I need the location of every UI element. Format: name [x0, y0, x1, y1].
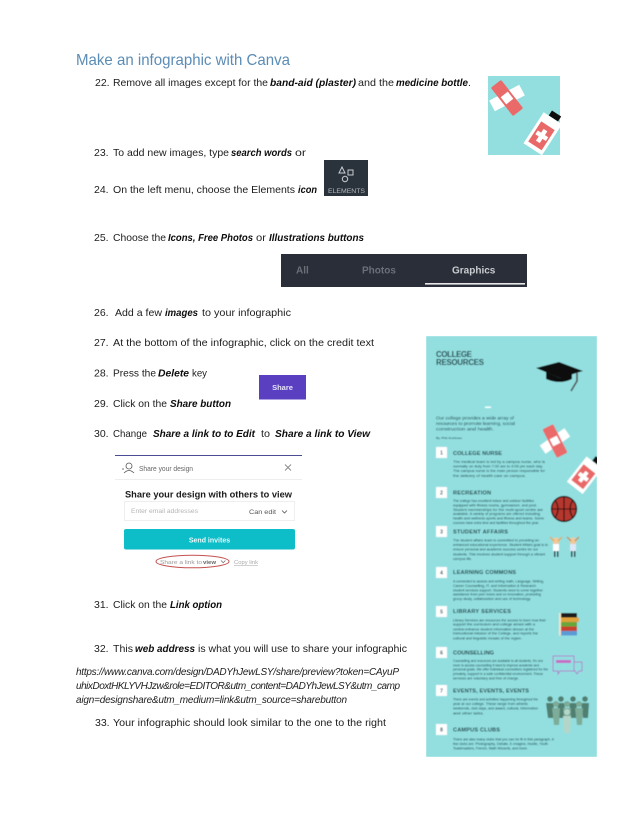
email field: [124, 502, 294, 520]
icon: stack of books: [559, 613, 579, 636]
icon: people: [122, 463, 134, 473]
step 27: 27.: [94, 337, 109, 349]
section 4: learning commons: 4: [440, 570, 443, 576]
section 6: counselling: more to access counselling if need to improve academic and: [453, 663, 539, 667]
section 6: counselling: services are voluntary and free of charge.: [453, 676, 519, 680]
send invites button: [124, 529, 295, 550]
section 4: learning commons: assistance from peer tutors and on innovation, promoting: [453, 593, 541, 597]
step 32: [94, 643, 407, 655]
step 29: 29.: [94, 398, 109, 410]
section 7: events, events, events: There are events and activities happening throughout the: [453, 698, 538, 702]
section 5: library services: Library Services are resources the access to learn how their: [453, 618, 547, 622]
image: band-aid and medicine bottle: [488, 76, 565, 155]
step 23: [94, 147, 307, 159]
section 2: recreation: 2: [440, 490, 443, 496]
section 7: events, events, events: 7: [440, 688, 443, 694]
section 2: recreation: equipped with fitness rooms, gymnasium, and pool.: [453, 503, 537, 507]
section 3: student affairs: enhanced educational experience. Student Affairs goal is to: [453, 543, 548, 547]
tab bar: all, photos, graphics: All: [296, 266, 309, 276]
title: Make an infographic with Canva: [76, 52, 290, 69]
step 26: images: [165, 307, 198, 319]
icon: close: [285, 464, 291, 470]
section 4: learning commons: LEARNING COMMONS: [453, 570, 516, 576]
step 30: 30.: [94, 428, 109, 440]
step 29: Share button: [170, 398, 231, 410]
section 5: library services: central entrance student information stream at the: [453, 627, 534, 631]
icon: elements button: [324, 160, 368, 196]
section 8: campus clubs: CAMPUS CLUBS: [453, 728, 500, 734]
tab bar: all, photos, graphics: Graphics: [452, 266, 496, 276]
section 4: learning commons: A connected to assess and writing math, Language, Writing,: [453, 579, 544, 583]
step 28: Delete: [158, 368, 189, 380]
section 8: campus clubs: There are also many clubs that you can be fit in this paragraph. A: [453, 737, 555, 741]
infographic heading: COLLEGE: [436, 350, 472, 359]
section 8: campus clubs: [436, 724, 555, 751]
section 1: college nurse: The medical team is led by a campus nurse, who is: [453, 460, 545, 464]
step 29: [94, 398, 231, 410]
step 30: to: [261, 428, 270, 440]
tab bar: all, photos, graphics: Photos: [362, 266, 396, 276]
section 7: events, events, events: [436, 685, 538, 716]
step 22: medicine bottle: [396, 77, 468, 89]
send invites button: Send invites: [189, 538, 230, 544]
infographic heading: [436, 350, 484, 367]
share link option, circled: [156, 555, 258, 568]
tab bar: all, photos, graphics: [281, 254, 527, 287]
step 23: search words: [231, 147, 292, 159]
panel: share your design dialog: [115, 455, 302, 568]
step 24: icon: [298, 184, 317, 196]
share button: [259, 375, 306, 400]
step 22: [95, 77, 471, 89]
web address link: uhixDoxtHKLYVHJzw&role=EDITOR&utm_content=DADYhJewLSY&utm_camp: [76, 681, 400, 692]
share link option, circled: Share a link to: [160, 560, 202, 566]
share link option, circled: view: [203, 560, 217, 566]
section 3: student affairs: [436, 526, 548, 561]
step 25: Icons, Free Photos: [168, 232, 253, 244]
web address link: https://www.canva.com/design/DADYhJewLSY/share/preview?token=CAyuP: [76, 667, 399, 678]
infographic heading: RESOURCES: [436, 358, 484, 367]
section 1: college nurse: normally on duty from 7:00 am to 4:00 pm each day.: [453, 465, 543, 469]
section 3: student affairs: The student affairs team is committed to providing an: [453, 538, 539, 542]
panel: college resources infographic: [426, 336, 606, 757]
section 5: library services: instructional mission of the College, and reports the: [453, 632, 538, 636]
email field: Enter email addresses: [131, 508, 199, 515]
icon: band-aid: [540, 424, 570, 458]
section 2: recreation: RECREATION: [453, 490, 491, 496]
section 2: recreation: available. A variety of programs are offered including: [453, 512, 540, 516]
section 3: student affairs: ensure personal and academic success centre for our: [453, 548, 539, 552]
icon: speech bubbles: [553, 656, 582, 674]
step 25: 25.: [94, 232, 109, 244]
section 1: college nurse: [436, 447, 546, 478]
share link option, circled: Copy link: [234, 560, 258, 566]
section 1: college nurse: the delivery of health care on campus.: [453, 474, 526, 478]
section 6: counselling: Counselling and resources are available to all students. It's one: [453, 659, 543, 663]
section 6: counselling: personal goals. We offer individual counsellors registered for the: [453, 668, 548, 672]
step 32: is what you will use to share your infographic: [198, 643, 407, 655]
intro text: By Phil Archives: [436, 436, 463, 440]
icon: graduation cap: [536, 362, 583, 391]
panel: share your design dialog: Share your design: [139, 464, 193, 473]
step 25: Illustrations buttons: [269, 232, 364, 244]
section 1: college nurse: 1: [440, 450, 443, 456]
section 8: campus clubs: Toastmasters, French, Math Wizards, and more.: [453, 747, 528, 751]
step 31: Click on the: [113, 599, 167, 611]
section 4: learning commons: group study, collaboration and use of technology.: [453, 597, 531, 601]
step 23: To add new images, type: [113, 147, 229, 159]
section 6: counselling: privately, support in a safe confidential environment. These: [453, 672, 543, 676]
section 4: learning commons: Career Counselling, IT, and Information & Research: [453, 584, 536, 588]
web address link: [76, 667, 400, 706]
section 7: events, events, events: year at our college. These range from athletic: [453, 702, 528, 706]
section 5: library services: cultural and linguistic mosaic of the region.: [453, 637, 522, 641]
section 6: counselling: [436, 647, 548, 680]
icon: elements button: ELEMENTS: [328, 188, 365, 195]
icon: band-aid: [489, 80, 525, 116]
section 5: library services: 5: [440, 610, 443, 616]
step 22: band-aid (plaster): [270, 77, 356, 89]
step 24: On the left menu, choose the Elements: [113, 184, 295, 196]
step 27: At the bottom of the infographic, click on the credit text: [113, 337, 374, 349]
step 26: Add a few: [115, 307, 162, 319]
step 25: Choose the: [113, 232, 166, 244]
step 29: Click on the: [113, 398, 167, 410]
section 3: student affairs: campus life.: [453, 557, 472, 561]
section 2: recreation: courses have extra time and facilities throughout the year.: [453, 521, 539, 525]
step 30: Share a link to to Edit: [153, 428, 255, 440]
step 31: [94, 599, 222, 611]
section 2: recreation: health and wellness sports and fitness and teams. Some: [453, 517, 544, 521]
step 22: 22.: [95, 77, 110, 89]
step 23: 23.: [94, 147, 109, 159]
step 32: web address: [135, 643, 195, 655]
step 26: [94, 307, 291, 319]
section 6: counselling: 6: [440, 650, 443, 656]
icon: group of people: [546, 696, 589, 733]
panel: share your design dialog: Share your design with others to view: [125, 490, 293, 500]
step 32: 32.: [94, 643, 109, 655]
step 30: Change: [113, 428, 147, 440]
step 33: 33.: [95, 717, 110, 729]
step 33: Your infographic should look similar to the one to the right: [113, 717, 386, 729]
section 4: learning commons: student services support. Students need to come together: [453, 588, 544, 592]
web address link: aign=designshare&utm_medium=link&utm_source=sharebutton: [76, 695, 347, 706]
section 1: college nurse: The campus nurse is the main person responsible for: [453, 469, 546, 473]
email field: Can edit: [249, 509, 276, 516]
section 5: library services: LIBRARY SERVICES: [453, 609, 511, 615]
icon: two students: [550, 537, 579, 557]
step 28: key: [192, 368, 208, 380]
icon: medicine bottle: [524, 107, 565, 155]
share button: Share: [272, 383, 293, 392]
step 31: Link option: [170, 599, 222, 611]
step 28: Press the: [113, 368, 156, 380]
step 30: Share a link to View: [275, 428, 371, 440]
section 7: events, events, events: weekends, club days, and award, cultural, information: [453, 707, 538, 711]
intro text: [436, 416, 515, 440]
step 26: to your infographic: [202, 307, 291, 319]
section 3: student affairs: students. This involves student support through a vibrant: [453, 552, 545, 556]
step 25: [94, 232, 364, 244]
section 6: counselling: COUNSELLING: [453, 650, 494, 656]
step 22: .: [468, 77, 471, 89]
step 23: or: [295, 147, 307, 159]
section 8: campus clubs: 8: [440, 728, 443, 734]
step 28: [94, 368, 208, 380]
icon: medicine bottle: [566, 456, 597, 494]
section 8: campus clubs: few clubs are: Photography, Debate, E-Imagine, Hustle, Youth: [453, 742, 548, 746]
section 2: recreation: Student memberships for the multi-sport centre are: [453, 508, 543, 512]
step 22: Remove all images except for the: [113, 77, 268, 89]
section 1: college nurse: COLLEGE NURSE: [453, 451, 502, 457]
step 24: 24.: [94, 184, 109, 196]
section 5: library services: [436, 606, 547, 641]
icon: basketball: [552, 496, 576, 522]
intro text: Our college provides a wide array of: [436, 416, 515, 420]
section 7: events, events, events: EVENTS, EVENTS, EVENTS: [453, 688, 529, 694]
section 2: recreation: The college has excellent indoor and outdoor facilities: [453, 499, 534, 503]
section 2: recreation: [436, 487, 544, 525]
step 31: 31.: [94, 599, 109, 611]
step 32: This: [113, 643, 133, 655]
step 26: 26.: [94, 307, 109, 319]
intro text: construction and health.: [436, 426, 494, 432]
intro text: resources to promote learning, social: [436, 421, 515, 426]
section 4: learning commons: [436, 567, 544, 601]
section 5: library services: support the curriculum and college aimed with a: [453, 623, 536, 627]
section 7: events, events, events: and other talks.: [453, 712, 484, 716]
step 22: and the: [358, 77, 394, 89]
step 30: [94, 428, 371, 440]
section 3: student affairs: STUDENT AFFAIRS: [453, 530, 508, 536]
step 28: 28.: [94, 368, 109, 380]
section 3: student affairs: 3: [440, 530, 443, 536]
step 25: or: [256, 232, 267, 244]
